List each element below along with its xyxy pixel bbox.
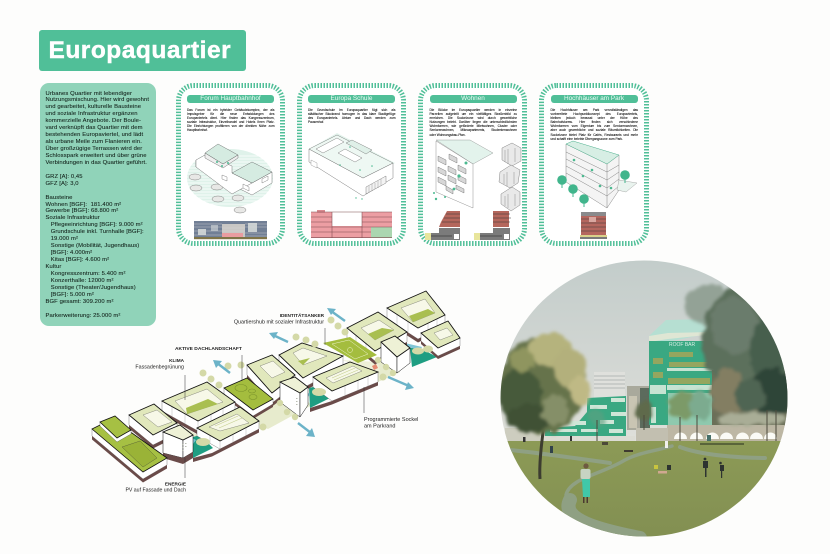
panel: project description and key figures: Pflegeeinrichtung [BGF]: 9.000 m² xyxy=(51,222,143,228)
roof: football pitch xyxy=(323,337,377,363)
tower: energy xyxy=(163,425,193,464)
text: high-rise description: bleiben jedoch bewusst unter der Höhe des xyxy=(550,116,638,120)
lawn xyxy=(508,441,780,536)
panel: project description and key figures: Schlosspark erweitert und über grüne xyxy=(46,153,147,159)
text: housing description: Parzellen aufgeteilt um ein vielfältiges Straßenbild zu xyxy=(430,112,517,116)
block: park edge west xyxy=(193,407,259,462)
panel: project description and key figures: BGF gesamt: 309.200 m² xyxy=(46,299,114,305)
panel: project description and key figures: Kultur xyxy=(46,264,61,270)
label: Programmierte Sockel xyxy=(364,417,418,430)
text: housing description: Wohnformen, wie geförderte Mietwohnen, Cluster oder xyxy=(430,124,517,128)
illustration: housing section xyxy=(433,140,521,211)
label: Energie: PV auf Fassade und Dach xyxy=(125,488,186,494)
text: housing description: Nutzungen belebt. Darüber liegen die unterschiedlichsten xyxy=(430,120,517,124)
background white tower xyxy=(594,372,625,394)
text: Forum description: Hauptbahnhof. xyxy=(187,128,208,132)
text: high-rise description: vorbereitete Hochpunktkonzept des Europaviertels, xyxy=(550,112,638,116)
label: Energie: ENERGIE xyxy=(165,482,186,486)
panel: project description and key figures: Wohnen [BGF]: 181.400 m² xyxy=(46,202,121,208)
panel: project description and key figures: Soziale Infrastruktur xyxy=(46,215,100,221)
illustration: school building xyxy=(309,133,395,200)
text: high-rise description: Die Hochhäuser am Park vervollständigen das xyxy=(550,108,638,112)
arrows: connections xyxy=(213,308,414,437)
text: high-rise description: aber auch gewerbliche und soziale Räumlichkeiten. Die xyxy=(550,128,638,132)
elevation: housing xyxy=(425,211,511,240)
heading: Forum Hauptbahnhof xyxy=(187,95,274,103)
dark backdrop right of high-rise xyxy=(712,370,788,426)
lawn paths xyxy=(510,446,765,538)
block: west courtyard xyxy=(129,404,177,448)
title xyxy=(39,30,246,70)
green high-rise with roof bar: ROOF BAR xyxy=(669,342,696,348)
heading: Wohnen xyxy=(430,95,516,103)
panel: Forum Hauptbahnhof xyxy=(176,83,285,246)
panel: project description and key figures: als urbane Meile zum Flanieren ein. xyxy=(46,139,142,145)
text: housing description: erreichen. Die Sockelzone wird durch gewerbliche xyxy=(430,116,517,120)
text: Forum description: Die Einrichtungen profitieren von der direkten Nähe zum xyxy=(187,124,274,128)
panel: project description and key figures: Über großzügige Terrassen wird der xyxy=(46,146,142,152)
panel: project description and key figures xyxy=(40,83,156,326)
elevation: forum xyxy=(194,221,267,239)
panel: project description and key figures: und soziale Infrastruktur ergänzen xyxy=(46,111,138,117)
block: large courtyard xyxy=(162,382,235,434)
panel: project description and key figures: Grundschule inkl. Turnhalle [BGF]: xyxy=(51,229,144,235)
panel: project description and key figures: kommerzielle Angebote. Der Boule- xyxy=(46,118,141,124)
street trees xyxy=(589,391,776,446)
block: identity anchor north xyxy=(347,312,407,364)
illustration: forum building xyxy=(186,144,274,213)
heading: Wohnen: Wohnen xyxy=(461,95,485,102)
trees xyxy=(196,316,433,446)
tower: middle xyxy=(280,377,308,417)
panel: project description and key figures: Kitas [BGF]: 4.600 m² xyxy=(51,257,109,263)
block: north-east xyxy=(387,291,445,342)
text: high-rise description: Wohnformen vom Eigentum bis zum Seniorenwohnen, xyxy=(550,124,638,128)
panel: project description and key figures: [BGF]: 4.000m² xyxy=(51,250,92,256)
sky xyxy=(500,255,790,445)
green building left xyxy=(540,396,626,437)
panel: project description and key figures: Bausteine xyxy=(46,195,72,201)
text: housing description: oder Wohnungsbau-Plan. xyxy=(430,133,466,137)
block: middle xyxy=(247,355,295,406)
panel: project description and key figures: 19.000 m² xyxy=(51,236,78,242)
text: school description: städtischer Blockrand homogen in das klare Stadtgefüge xyxy=(308,112,396,116)
panel: project description and key figures: Kongresszentrum: 5.400 m² xyxy=(51,271,126,277)
people xyxy=(523,435,744,503)
panel: project description and key figures: Sonstige (Theater/Jugendhaus) xyxy=(51,285,136,291)
text: Forum description: Impulsgeber für die neue Entwicklungen des xyxy=(187,112,274,116)
leader lines xyxy=(185,328,364,478)
label: Identitätsanker xyxy=(234,312,325,326)
text: high-rise description: Sockelzone bietet Platz für Cafés, Restaurants und mehr xyxy=(550,133,638,137)
text: Forum description xyxy=(187,108,274,132)
label: Energie xyxy=(125,482,186,494)
label: Klima: KLIMA xyxy=(169,358,185,363)
text: housing description: Die Blöcke im Europaquartier werden in einzelne xyxy=(430,108,517,112)
panel: project description and key figures: bestehenden Europaviertel, und lädt xyxy=(46,132,143,138)
panel: project description and key figures: GFZ [A]: 3,0 xyxy=(46,181,79,187)
text: high-rise description: Bahnhofsturms. Hier finden sich verschiedene xyxy=(550,120,638,124)
heading: Europa Schule xyxy=(308,95,395,103)
ground and green courtyards xyxy=(170,343,437,458)
panel: project description and key figures: Konzerthalle: 12000 m² xyxy=(51,278,114,284)
elevation: high-rise xyxy=(580,212,607,239)
middle buildings xyxy=(627,386,650,430)
heading: Hochhäuser am Park xyxy=(550,95,638,103)
block: east xyxy=(421,321,460,359)
panel: project description and key figures: und gearbeitet, kulturelle Bausteine xyxy=(46,104,141,110)
heading: Forum Hauptbahnhof: Forum Hauptbahnhof xyxy=(200,95,261,102)
panel: Europa Schule xyxy=(297,83,406,246)
block: central xyxy=(279,343,343,392)
arcade base xyxy=(505,425,792,442)
large tree upper right xyxy=(683,282,788,427)
panel: project description and key figures: Nutzungsmischung. Hier wird gewohnt xyxy=(46,97,149,103)
label: Programmierte Sockel: Programmierte Sockel xyxy=(364,417,418,423)
text: school description: Die Grundschule im Europaquartier fügt sich als xyxy=(308,108,396,112)
label: Identitätsanker: IDENTITÄTSANKER xyxy=(280,312,325,318)
tower: east xyxy=(381,336,410,373)
text: high-rise description xyxy=(550,108,638,141)
text: housing description xyxy=(430,108,517,137)
panel: project description and key figures: [BGF]: 5.000 m² xyxy=(51,292,94,298)
label: Klima: Fassadenbegrünung xyxy=(135,364,184,370)
label: Identitätsanker: Quartiershub mit sozialer Infrastruktur xyxy=(234,320,324,326)
heading: Europa Schule: Europa Schule xyxy=(331,95,372,102)
text: housing description: Seniorenwohnen, Mikroapartments, Studentenwohnen xyxy=(430,128,517,132)
text: high-rise description: und schafft eine belebte Übergangszone zum Park. xyxy=(550,137,623,141)
panel: project description and key figures: Verbindungen in das Quartier geführt. xyxy=(46,160,147,166)
text: school description xyxy=(308,108,396,124)
text: school description: des Europaviertels. Atrium und Dach werden zum xyxy=(308,116,396,120)
panel: project description and key figures: Sonstige (Mobilität, Jugendhaus) xyxy=(51,243,139,249)
panel: Wohnen xyxy=(418,83,527,246)
text: school description: Pausenhof. xyxy=(308,120,324,124)
text: Forum description: Europaviertels dient. Hier finden das Kongresszentrum, xyxy=(187,116,274,120)
text: Forum description: soziale Infrastruktur, Einzelhandel und Hotels ihren Platz. xyxy=(187,120,274,124)
illustration: park visualisation xyxy=(500,260,788,536)
block: low slab with green roof xyxy=(92,416,167,482)
roof: active roof landscape xyxy=(224,378,273,419)
elevation: school xyxy=(311,210,392,238)
block: park edge east xyxy=(310,362,378,412)
text: Forum description: Das Forum ist ein hybrider Gebäudekomplex, der als xyxy=(187,108,274,112)
panel: project description and key figures: vard verknüpft das Quartier mit dem xyxy=(46,125,143,131)
panel: project description and key figures: Gewerbe [BGF]: 68.800 m² xyxy=(46,208,118,214)
label: Programmierte Sockel: am Parkrand xyxy=(364,424,396,430)
heading: Hochhäuser am Park: Hochhäuser am Park xyxy=(564,95,624,102)
left tree xyxy=(498,333,591,479)
green high-rise with roof bar xyxy=(649,319,716,425)
label: Aktive Dachlandschaft: AKTIVE DACHLANDSCHAFT xyxy=(175,346,242,352)
illustration: high-rise tower xyxy=(557,141,637,208)
panel: project description and key figures: Parkerweiterung: 25.000 m² xyxy=(46,312,120,318)
panel: project description and key figures: Urbanes Quartier mit lebendiger xyxy=(46,90,132,96)
title: Europaquartier xyxy=(48,36,231,64)
panel: Hochhäuser am Park xyxy=(539,83,649,246)
panel: project description and key figures: GRZ [A]: 0,45 xyxy=(46,174,83,180)
label: Klima xyxy=(135,358,185,370)
